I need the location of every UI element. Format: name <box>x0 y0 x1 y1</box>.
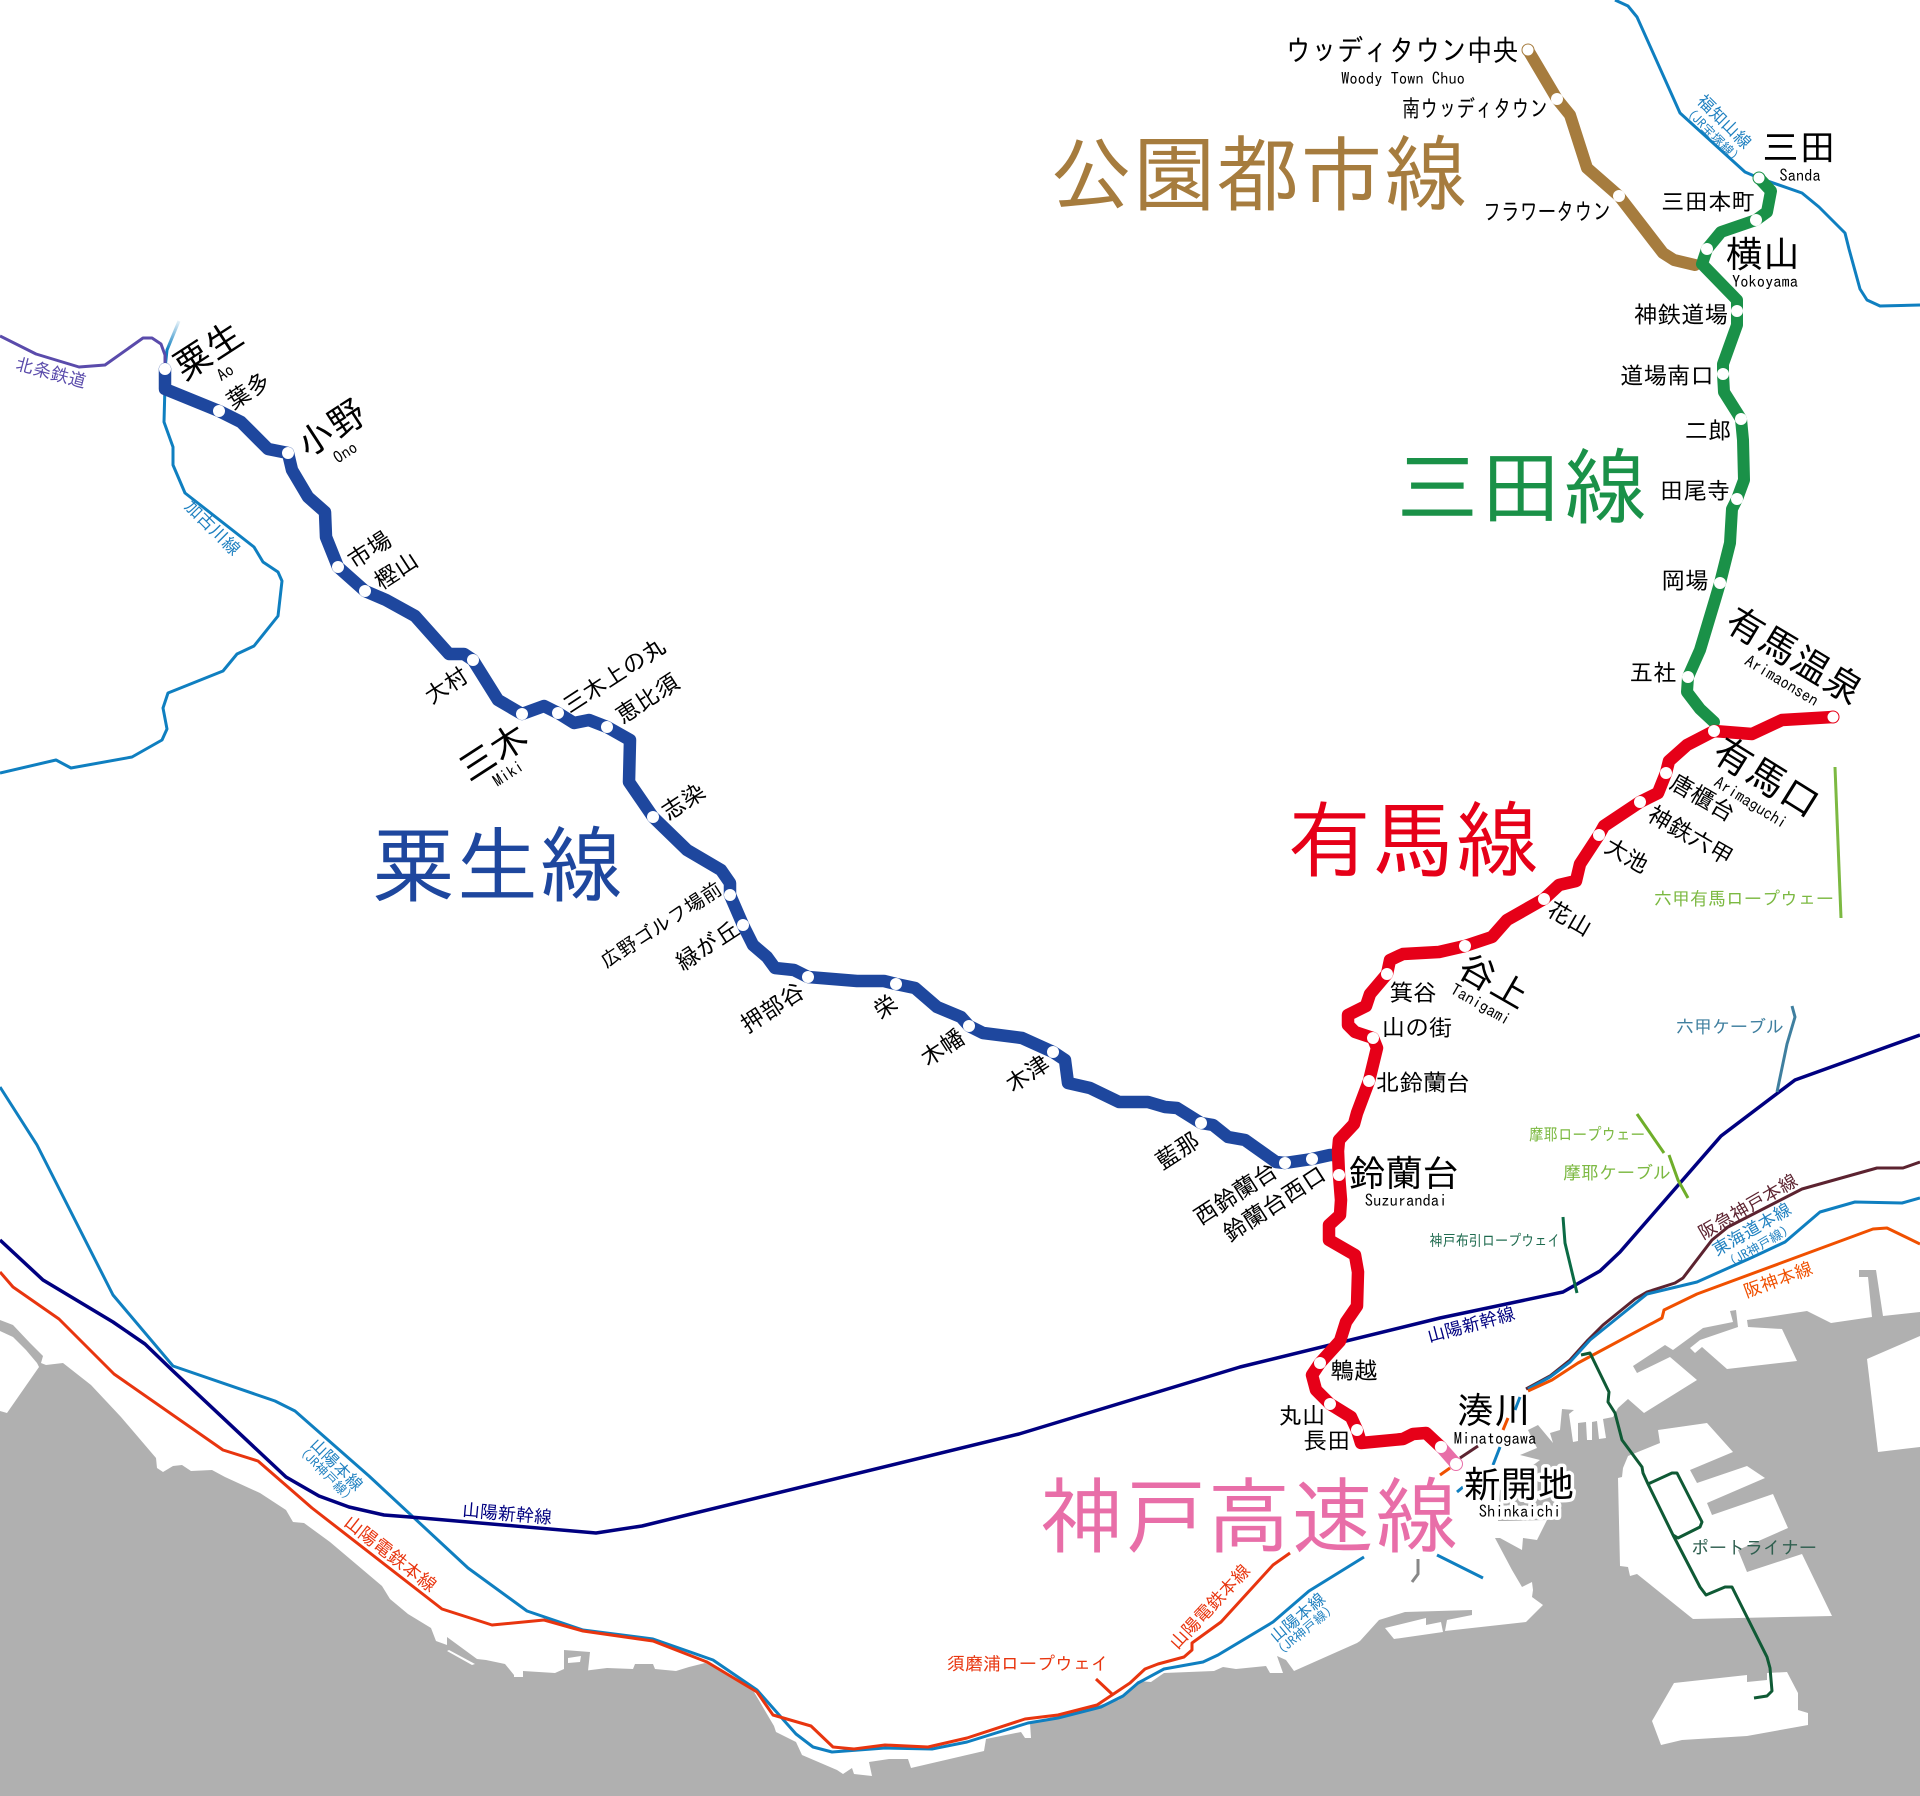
station: 粟生: Ao <box>213 360 237 384</box>
label: 山陽電鉄本線 right: 山陽電鉄本線 <box>1167 1561 1253 1653</box>
heading: 公園都市線: 公園都市線 <box>1049 132 1467 216</box>
label: 六甲ケーブル: 六甲ケーブル <box>1676 1017 1784 1036</box>
station: フラワータウン: フラワータウン <box>1483 199 1611 223</box>
station: 樫山: 樫山 <box>370 547 422 593</box>
label: 福知山線: （JR宝塚線） <box>1681 102 1746 167</box>
station: 有馬口: 有馬口 <box>1707 729 1827 825</box>
station: 新開地: 新開地 <box>1464 1466 1574 1502</box>
station: 横山: Yokoyama <box>1732 272 1798 290</box>
station: 横山 <box>1726 236 1800 290</box>
stations: 粟生線 <box>159 363 1318 1169</box>
station: 大村: 大村 <box>420 662 472 708</box>
label: 山陽電鉄本線 left: 山陽電鉄本線 <box>341 1512 440 1596</box>
stations: 公園都市線 <box>1522 44 1625 202</box>
station: 木津: 木津 <box>1001 1050 1053 1096</box>
stations: 有馬線 <box>1314 711 1839 1470</box>
station: 木幡: 木幡 <box>916 1024 968 1070</box>
label: 山陽新幹線 left: 山陽新幹線 <box>461 1501 553 1527</box>
station: 葉多: 葉多 <box>222 367 274 413</box>
railway: 須磨浦ロープウェイ <box>1096 1679 1112 1694</box>
station: 三木上の丸: 三木上の丸 <box>558 633 670 717</box>
railway: 加古川線 <box>0 321 282 773</box>
station: ウッディタウン中央 <box>1286 35 1518 86</box>
heading: 三田線: 三田線 <box>1396 446 1646 528</box>
railway: grey stub <box>1412 1559 1418 1582</box>
railway: 神戸布引ロープウェイ <box>1563 1217 1577 1293</box>
label: 山陽新幹線 right: 山陽新幹線 <box>1425 1305 1517 1345</box>
railway: 東海道本線 JR神戸線 <box>1528 1198 1920 1389</box>
station: 三田: 三田 <box>1762 128 1836 166</box>
label: 神戸布引ロープウェイ: 神戸布引ロープウェイ <box>1430 1232 1560 1248</box>
station: 鈴蘭台: Suzurandai <box>1365 1192 1447 1208</box>
label: 阪急神戸本線: 阪急神戸本線 <box>1695 1170 1801 1243</box>
main line: 公園都市線 <box>1528 50 1695 265</box>
station: 緑が丘: 緑が丘 <box>671 916 743 974</box>
station labels: 粟生線 <box>167 314 1330 1245</box>
railway: 山陽新幹線 <box>0 1035 1920 1533</box>
station: 鈴蘭台西口: 鈴蘭台西口 <box>1218 1161 1330 1245</box>
heading: 有馬線: 有馬線 <box>1288 798 1538 882</box>
station: 市場: 市場 <box>343 526 395 572</box>
station: ウッディタウン中央: ウッディタウン中央 <box>1286 35 1518 65</box>
station: 鈴蘭台: 鈴蘭台 <box>1348 1154 1460 1192</box>
label: 福知山線: 福知山線 <box>1694 91 1755 152</box>
station: 唐櫃台: 唐櫃台 <box>1666 769 1740 825</box>
railway: 北条鉄道 <box>0 336 165 369</box>
station: 栄: 栄 <box>869 990 901 1022</box>
label: 加古川線: 加古川線 <box>181 497 244 559</box>
label: 山陽本線 right: 山陽本線 <box>1266 1589 1328 1645</box>
station: 大池: 大池 <box>1601 833 1653 877</box>
label: 山陽本線 left: （JR神戸線） <box>294 1441 359 1506</box>
heading: 粟生線: 粟生線 <box>372 824 622 906</box>
main line: 三田線 <box>1687 178 1771 722</box>
station: 丸山: 丸山 <box>1278 1403 1326 1427</box>
station: 湊川: Minatogawa <box>1454 1430 1536 1446</box>
label: 須磨浦ロープウェイ: 須磨浦ロープウェイ <box>947 1654 1109 1673</box>
station: 有馬口: Arimaguchi <box>1712 773 1790 831</box>
station labels: 有馬線 <box>1278 600 1870 1520</box>
station: ウッディタウン中央: Woody Town Chuo <box>1341 70 1465 86</box>
station: 谷上: Tanigami <box>1448 980 1514 1028</box>
main line: 有馬線 <box>1312 717 1833 1447</box>
station: 藍那: 藍那 <box>1151 1127 1203 1173</box>
station: 道場南口: 道場南口 <box>1620 363 1714 387</box>
station: 五社: 五社 <box>1630 660 1676 684</box>
label: 摩耶ロープウェー: 摩耶ロープウェー <box>1529 1126 1645 1144</box>
railway: 山陽本線 JR神戸線 <box>0 1087 1520 1752</box>
station: 志染: 志染 <box>657 778 709 824</box>
label: 山陽本線 right: （JR神戸線） <box>1270 1599 1339 1660</box>
station: 花山: 花山 <box>1544 896 1596 940</box>
label: 東海道本線: 東海道本線 <box>1709 1200 1795 1259</box>
station: 長田: 長田 <box>1304 1428 1350 1452</box>
label: 北条鉄道: 北条鉄道 <box>14 354 88 391</box>
label: 六甲有馬ロープウェー: 六甲有馬ロープウェー <box>1654 889 1834 908</box>
station: 山の街: 山の街 <box>1382 1015 1452 1039</box>
station: 小野: Ono <box>330 438 360 466</box>
railway: 六甲有馬ロープウェー <box>1835 767 1841 918</box>
station: 北鈴蘭台: 北鈴蘭台 <box>1376 1070 1470 1094</box>
station: 湊川 <box>1454 1392 1536 1446</box>
station: 岡場: 岡場 <box>1662 568 1708 592</box>
station: 鵯越: 鵯越 <box>1330 1358 1378 1382</box>
map: sea and port land <box>0 1270 1920 1796</box>
station: 広野ゴルフ場前: 広野ゴルフ場前 <box>597 878 725 972</box>
railway: ポートライナー <box>1581 1353 1772 1698</box>
station: 神鉄六甲: 神鉄六甲 <box>1644 801 1738 869</box>
station: 神鉄道場: 神鉄道場 <box>1634 302 1728 326</box>
stations: 三田線 <box>1682 172 1765 683</box>
label: 阪神本線: 阪神本線 <box>1741 1258 1815 1301</box>
station: 西鈴蘭台: 西鈴蘭台 <box>1189 1157 1281 1229</box>
railway: 阪神本線 <box>1440 1228 1920 1475</box>
station: 粟生: 粟生 <box>167 314 249 386</box>
station: 南ウッディタウン: 南ウッディタウン <box>1402 96 1548 120</box>
station: 恵比須: 恵比須 <box>611 669 683 727</box>
station: 有馬温泉: Arimaonsen <box>1742 651 1822 709</box>
station: 湊川: 湊川 <box>1457 1392 1531 1428</box>
station: 三木: 三木 <box>452 716 534 788</box>
label: 山陽本線 left: 山陽本線 <box>308 1435 367 1494</box>
railway: 山陽電鉄本線 <box>0 1272 1290 1749</box>
station: 二郎: 二郎 <box>1684 418 1732 442</box>
railway: 阪急神戸本線 <box>1460 1162 1920 1458</box>
railway: 摩耶ロープウェー <box>1637 1114 1664 1153</box>
station: 押部谷: 押部谷 <box>736 978 808 1036</box>
station: 谷上: 谷上 <box>1453 946 1535 1016</box>
station: 新開地 <box>1464 1466 1574 1520</box>
label: 東海道本線: （JR神戸線） <box>1721 1220 1796 1271</box>
railway: 福知山線 <box>1615 0 1920 306</box>
heading: 神戸高速線: 神戸高速線 <box>1040 1474 1458 1558</box>
railway: 六甲ケーブル <box>1777 1006 1795 1092</box>
main line: 神戸高速線 <box>1441 1447 1456 1464</box>
label: ポートライナー: ポートライナー <box>1691 1539 1817 1557</box>
station: 田尾寺: 田尾寺 <box>1660 478 1730 502</box>
station: 有馬温泉: 有馬温泉 <box>1720 600 1870 710</box>
station: 横山: 横山 <box>1726 236 1800 272</box>
main line: 粟生線 <box>165 369 1337 1163</box>
station labels: 公園都市線 <box>1286 35 1611 223</box>
station: 三田: Sanda <box>1779 166 1821 184</box>
station: 三田 <box>1762 128 1836 184</box>
station: 新開地: Shinkaichi <box>1479 1502 1561 1520</box>
station: 三木: Miki <box>490 757 526 789</box>
railway: 摩耶ケーブル <box>1669 1155 1688 1198</box>
station: 箕谷: 箕谷 <box>1390 980 1436 1004</box>
station: 小野: 小野 <box>290 392 372 464</box>
label: 摩耶ケーブル: 摩耶ケーブル <box>1563 1163 1671 1182</box>
station labels: 三田線 <box>1620 128 1836 684</box>
station: 三田本町: 三田本町 <box>1661 189 1755 213</box>
station: 鈴蘭台 <box>1348 1154 1460 1208</box>
